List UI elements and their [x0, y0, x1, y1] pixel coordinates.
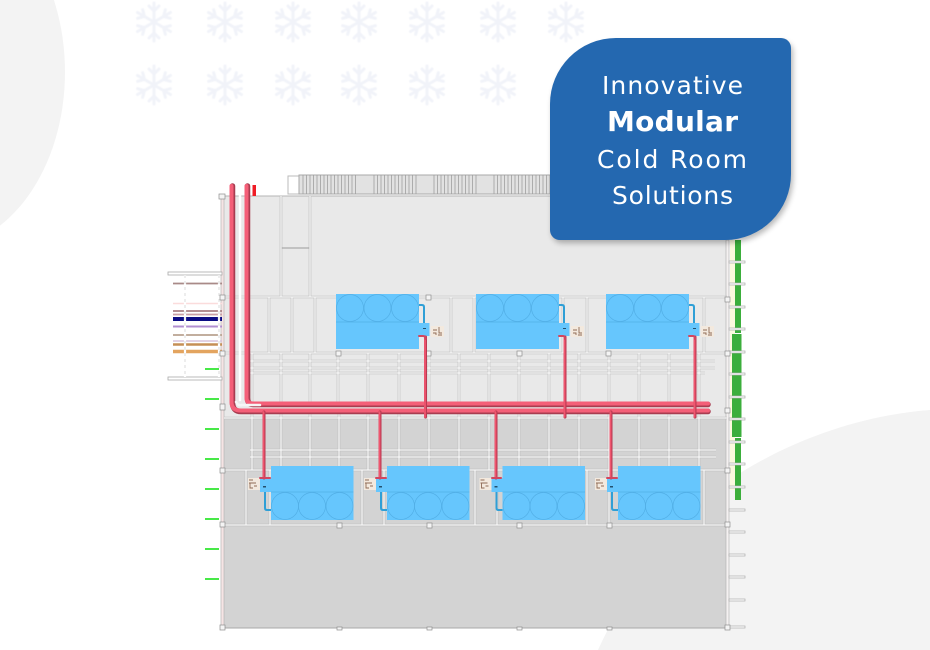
background blob: top left [0, 0, 65, 248]
title card [550, 38, 793, 243]
title text: Cold Room [597, 145, 747, 174]
background blob: bottom right [598, 410, 930, 650]
red refrigerant piping [232, 185, 708, 478]
right side tick brackets [729, 261, 745, 628]
left green markers [205, 369, 219, 579]
upper cold room floor [222, 196, 727, 418]
right green strip [730, 240, 742, 500]
title text: Innovative [602, 71, 743, 100]
title text [597, 71, 747, 210]
card shadow [552, 42, 793, 243]
left side connections [168, 272, 222, 380]
structural beams [224, 196, 727, 525]
snowflake pattern [135, 3, 585, 104]
rooftop unit [288, 175, 554, 194]
lower refrigeration units [248, 466, 700, 520]
lower cold room floor [222, 418, 727, 628]
right wall [726, 240, 729, 628]
title text: Solutions [612, 181, 733, 210]
column markers [219, 194, 730, 630]
card background [550, 38, 791, 240]
floor plan diagram [168, 175, 745, 630]
title text: Modular [607, 105, 738, 138]
left wall [221, 196, 224, 628]
upper refrigeration units [336, 294, 714, 349]
